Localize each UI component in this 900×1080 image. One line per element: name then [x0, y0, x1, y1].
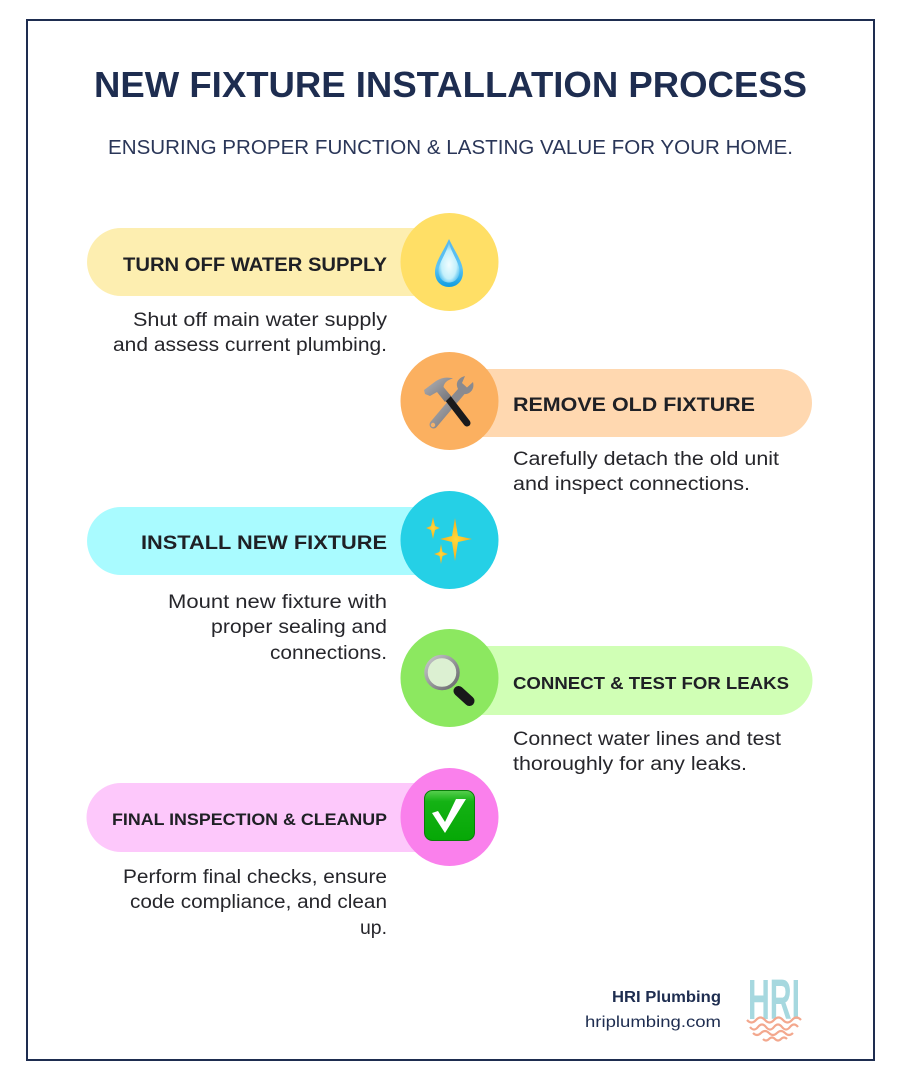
step 2 description: Carefully detach the old unit [513, 449, 780, 470]
step 3 description [168, 592, 387, 664]
step 2 description [513, 449, 780, 495]
logo [747, 968, 801, 1040]
step 5: final inspection and cleanup [87, 768, 499, 939]
step 4 circle [400, 629, 498, 727]
icon: water drop [435, 239, 463, 287]
step 4: connect and test for leaks [400, 629, 813, 775]
step 5 description: up. [360, 918, 387, 939]
step 4 description: thoroughly for any leaks. [513, 754, 747, 775]
step 1 description [113, 310, 388, 356]
step 3 description: Mount new fixture with [168, 592, 387, 613]
step 3 description: proper sealing and [211, 617, 387, 638]
icon: hammer and wrench [424, 376, 473, 427]
step 1 description: Shut off main water supply [133, 310, 388, 331]
step 4 description [513, 729, 782, 775]
step 5 heading: FINAL INSPECTION & CLEANUP [112, 810, 387, 829]
step 2 description: and inspect connections. [513, 474, 750, 495]
step 2 heading: REMOVE OLD FIXTURE [513, 395, 755, 416]
step 1: turn off water supply [87, 213, 499, 356]
step 3 description: connections. [270, 643, 387, 664]
logo: HRI [748, 968, 800, 1032]
step 2 pill [449, 369, 812, 437]
step 5 pill [87, 783, 449, 852]
icon: magnifying glass [426, 656, 470, 701]
step 4 description: Connect water lines and test [513, 729, 782, 750]
subtitle: ENSURING PROPER FUNCTION & LASTING VALUE FOR YOUR HOME. [108, 137, 793, 159]
step 4 pill [449, 646, 813, 715]
step 3 circle [400, 491, 498, 589]
step 3 heading: INSTALL NEW FIXTURE [141, 533, 387, 554]
step 5 description [123, 867, 387, 939]
icon: check mark [424, 790, 474, 840]
footer website: hriplumbing.com [585, 1014, 721, 1031]
step 3 pill [87, 507, 449, 575]
step 5 circle [400, 768, 498, 866]
icon: sparkles [426, 517, 472, 564]
step 5 description: Perform final checks, ensure [123, 867, 387, 888]
footer brand name: HRI Plumbing [612, 989, 721, 1006]
step 2: remove old fixture [400, 352, 812, 495]
step 5 description: code compliance, and clean [130, 892, 387, 913]
step 1 circle [400, 213, 498, 311]
step 2 circle [400, 352, 498, 450]
step 1 heading: TURN OFF WATER SUPPLY [123, 255, 387, 276]
step 1 pill [87, 228, 449, 296]
step 4 heading: CONNECT & TEST FOR LEAKS [513, 673, 789, 693]
step 3: install new fixture [87, 491, 498, 664]
title: NEW FIXTURE INSTALLATION PROCESS [94, 64, 807, 105]
step 1 description: and assess current plumbing. [113, 335, 387, 356]
